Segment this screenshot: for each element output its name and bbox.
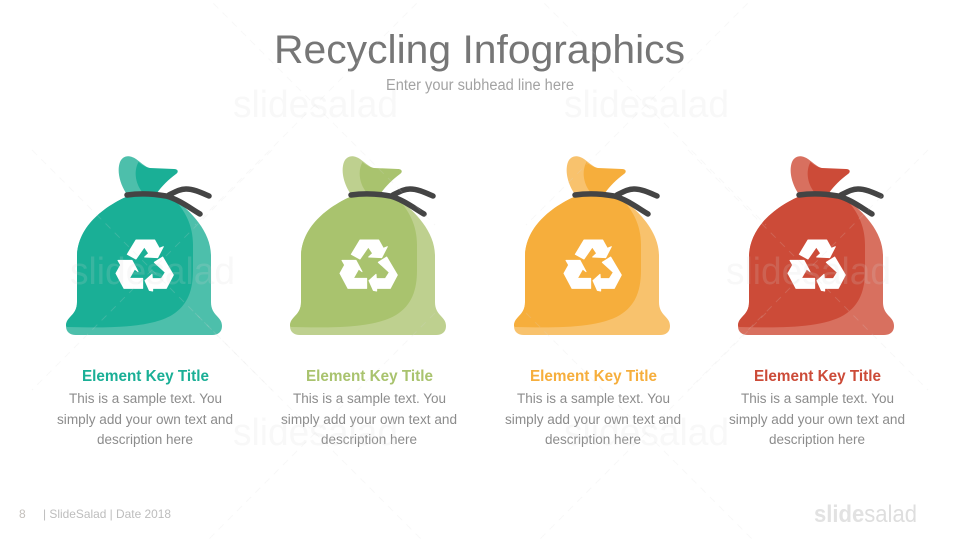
panel: red bag element — [729, 156, 905, 447]
watermark logos: slidesalad — [233, 412, 398, 454]
description: description here — [97, 432, 193, 447]
footer logo: slidesalad — [814, 501, 917, 528]
icon: recycling symbol — [116, 240, 173, 291]
key title: Element Key Title — [306, 368, 433, 385]
description — [57, 391, 233, 447]
icon: recycling symbol — [564, 240, 621, 291]
panel: green bag element — [281, 156, 457, 447]
icon: recycling symbol — [788, 240, 845, 291]
watermark logos: slidesalad — [70, 251, 235, 293]
icon: green garbage bag — [290, 156, 446, 335]
footer page number: 8 — [19, 507, 26, 521]
watermark logos: slidesalad — [726, 251, 891, 293]
description: simply add your own text and — [281, 412, 457, 427]
key title: Element Key Title — [754, 368, 881, 385]
icon: orange garbage bag — [514, 156, 670, 335]
description — [505, 391, 681, 447]
key title: Element Key Title — [530, 368, 657, 385]
watermark logos: slidesalad — [233, 84, 398, 126]
key title: Element Key Title — [82, 368, 209, 385]
description: This is a sample text. You — [517, 391, 670, 406]
subhead: Enter your subhead line here — [386, 77, 574, 94]
description — [281, 391, 457, 447]
icon: teal garbage bag — [66, 156, 222, 335]
footer text: | SlideSalad | Date 2018 — [43, 507, 171, 521]
description: This is a sample text. You — [69, 391, 222, 406]
watermark logos — [70, 84, 891, 454]
watermark logos: slidesalad — [564, 84, 729, 126]
icon: recycling symbol — [340, 240, 397, 291]
panel: teal bag element — [57, 156, 233, 447]
description: This is a sample text. You — [741, 391, 894, 406]
description — [729, 391, 905, 447]
watermark logos: slidesalad — [564, 412, 729, 454]
description: simply add your own text and — [505, 412, 681, 427]
description: This is a sample text. You — [293, 391, 446, 406]
description: description here — [769, 432, 865, 447]
description: simply add your own text and — [57, 412, 233, 427]
description: description here — [321, 432, 417, 447]
title: Recycling Infographics — [274, 28, 685, 72]
description: simply add your own text and — [729, 412, 905, 427]
panel: orange bag element — [505, 156, 681, 447]
icon: red garbage bag — [738, 156, 894, 335]
description: description here — [545, 432, 641, 447]
